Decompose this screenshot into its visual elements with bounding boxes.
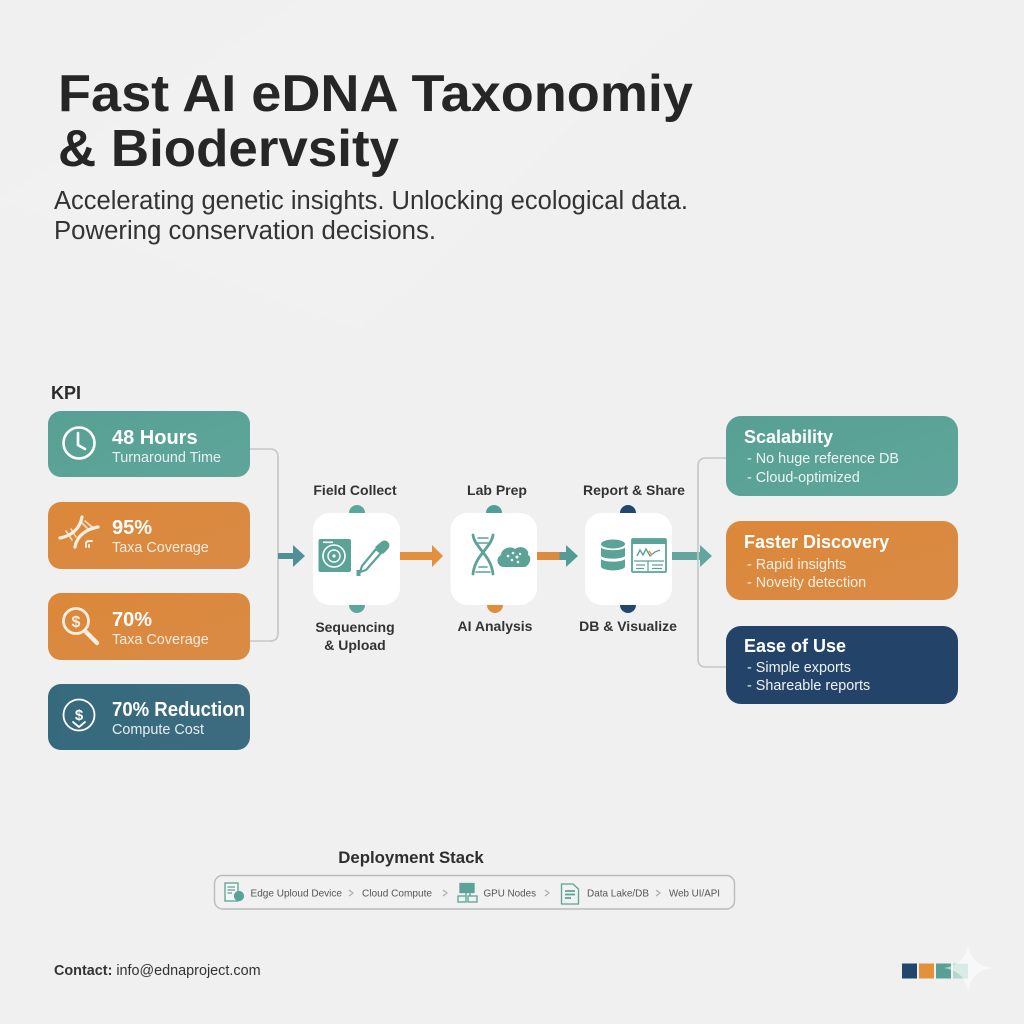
panel: ease of use: - Shareable reports [747,678,870,694]
icon: database [601,540,625,570]
panel: KPI 48 hours [48,411,250,477]
panel: ease of use [726,626,958,704]
panel: KPI 48 hours: 48 Hours [112,427,198,449]
panel: scalability: - No huge reference DB [747,451,899,467]
panel: ease of use: - Simple exports [747,660,851,676]
panel: ease of use: Ease of Use [744,636,846,656]
panel: KPI 70% reduction: $ [75,707,84,724]
arrow: step 1 to 2 [400,545,443,567]
panel: KPI 70% coverage [48,593,250,660]
panel: KPI 48 hours: Turnaround Time [112,450,221,466]
outcomes connector bracket [698,458,726,667]
panel: faster discovery: - Noveity detection [747,575,866,591]
panel: KPI 70% reduction: Compute Cost [112,722,204,738]
icon: DNA helix [473,535,493,574]
panel: KPI 70% coverage: 70% [112,609,152,631]
panel: KPI 95%: Taxa Coverage [112,540,209,556]
process labels [313,482,685,653]
footer colour squares [902,964,968,978]
subtitle [54,187,688,245]
process labels: Lab Prep [467,482,527,498]
arrow: KPI to process [278,545,305,567]
deployment heading: Deployment Stack [338,848,484,867]
contact: Contact: info@ednaproject.com [54,963,261,979]
icon: dashboard [632,539,666,572]
title: & Biodervsity [58,120,399,178]
KPI heading: KPI [51,383,81,403]
panel: KPI 95% [48,502,250,569]
panel: faster discovery [726,521,958,600]
subtitle: Accelerating genetic insights. Unlocking ecological data. [54,187,688,215]
chevrons [349,890,660,896]
panel: deployment stack [214,876,734,909]
deployment labels: GPU Nodes [484,888,536,900]
process labels: Field Collect [313,482,397,498]
panel: faster discovery: Faster Discovery [744,532,889,552]
panel: KPI 70% reduction: 70% Reduction [112,699,245,721]
icon: magnifier with dollar [64,608,97,643]
icon: clock [64,428,94,458]
arrow: process to outcomes [672,545,712,567]
icon: dollar reduction [64,700,94,730]
panel: step 1 card [313,513,400,605]
panel: scalability: - Cloud-optimized [747,470,860,486]
deployment labels: Data Lake/DB [587,888,649,900]
KPI connector bracket [250,449,278,641]
icon: AI cloud [497,547,530,567]
panel: KPI 70% reduction [48,684,250,750]
deployment labels: Edge Uploud Device [250,888,342,900]
deployment labels: Web UI/API [669,888,720,900]
icon: edge device [225,883,244,901]
panel: scalability [726,416,958,496]
panel: step 3 card [585,513,672,605]
deployment labels [250,888,720,900]
connector dots [349,505,636,613]
panel: scalability: Scalability [744,427,833,447]
icon: data lake file [562,884,578,904]
sparkle [944,944,992,992]
subtitle: Powering conservation decisions. [54,217,436,245]
panel: faster discovery: - Rapid insights [747,557,846,573]
icon: pipette [356,541,389,576]
process labels: AI Analysis [458,618,533,634]
deployment labels: Cloud Compute [362,888,432,900]
title [58,65,693,178]
process labels: DB & Visualize [579,618,677,634]
panel: KPI 70% coverage: $ [72,614,81,631]
process labels: & Upload [324,637,386,653]
panel: KPI 95%: 95% [112,517,152,539]
title: Fast AI eDNA Taxonomiy [58,65,693,123]
icon: GPU nodes [458,884,477,902]
process labels: Report & Share [583,482,685,498]
panel: step 2 card [450,513,537,605]
panel: KPI 70% coverage: Taxa Coverage [112,632,209,648]
arrow: step 2 to 3 [537,545,578,567]
icon: sequencer [318,539,351,572]
process labels: Sequencing [315,619,395,635]
icon: DNA [60,517,98,547]
